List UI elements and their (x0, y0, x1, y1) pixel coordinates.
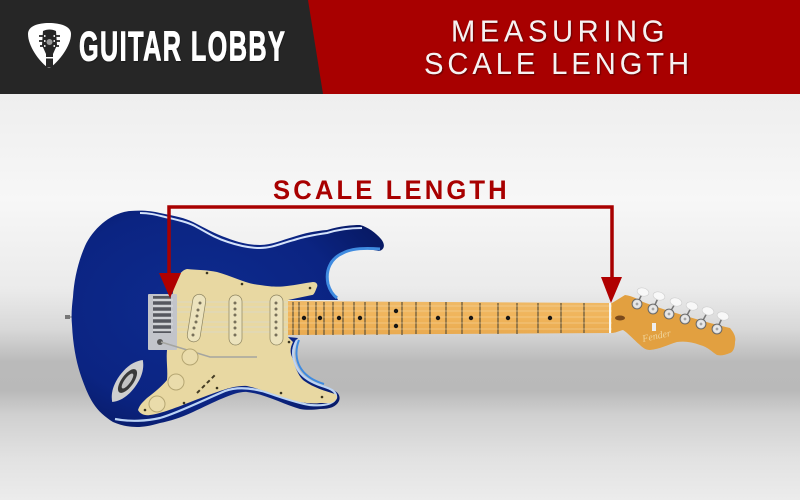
pickup selector switch (197, 374, 216, 393)
icon: guitar pick with headstock (28, 23, 71, 67)
knobs (149, 349, 198, 412)
body edge highlights (140, 213, 362, 248)
fret dots (302, 309, 552, 328)
tuners (632, 287, 730, 334)
pickguard screws (144, 272, 323, 411)
headstock (612, 295, 735, 355)
frets (293, 302, 584, 335)
title (424, 15, 689, 81)
guitar body (72, 211, 384, 427)
pickups (186, 293, 283, 345)
tremolo arm (161, 342, 257, 357)
guitar neck (288, 301, 640, 335)
strings over body (175, 302, 288, 332)
logo: Guitar Lobby (28, 23, 285, 70)
scale length bracket and arrows (159, 207, 622, 303)
bridge (148, 294, 177, 350)
pickup pole pieces (192, 302, 278, 336)
logo wordmark: GUITAR LOBBY (79, 24, 285, 70)
header banner (0, 0, 800, 94)
nut (609, 303, 611, 333)
neck strings (288, 306, 640, 329)
jack plate (105, 354, 150, 408)
guitar (65, 211, 735, 427)
strap pin (65, 315, 74, 319)
scale length heading: SCALE LENGTH (273, 174, 507, 205)
title: SCALE LENGTH (424, 47, 689, 81)
title: MEASURING (451, 15, 664, 49)
headstock: Fender (640, 328, 672, 345)
pickguard (138, 269, 337, 415)
